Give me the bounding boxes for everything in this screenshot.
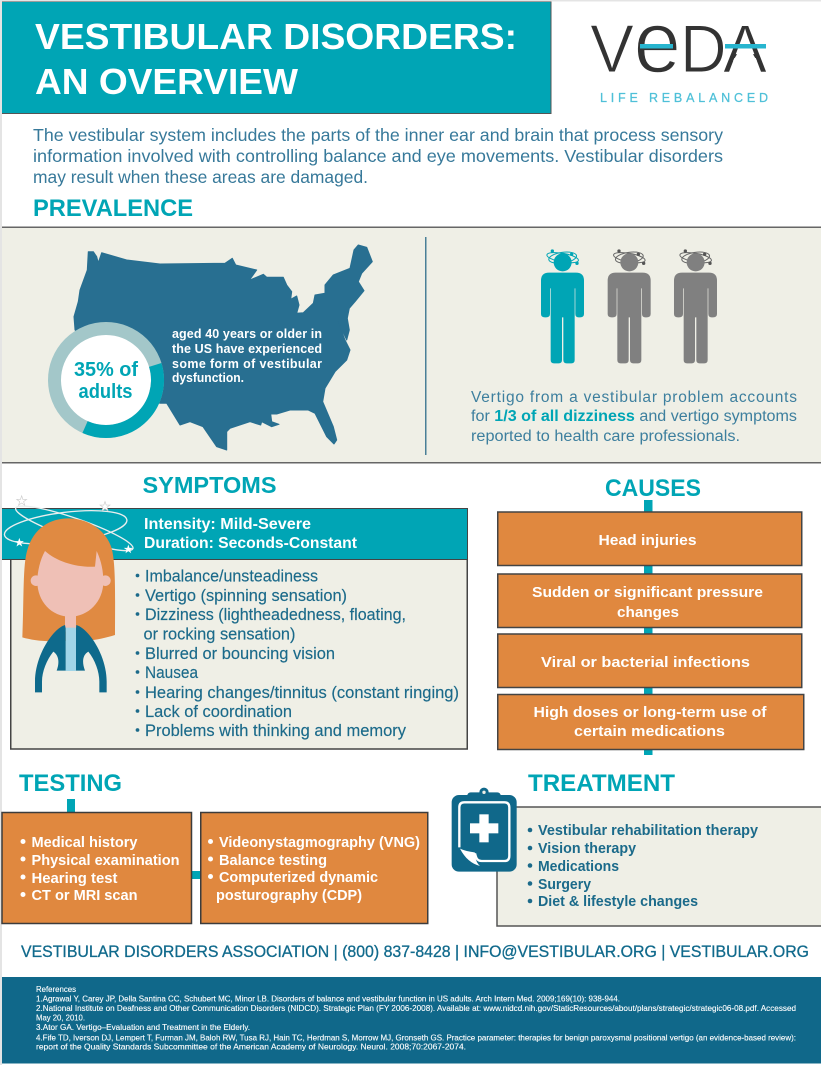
heading: treatment: TREATMENT bbox=[528, 770, 675, 797]
map text bbox=[172, 327, 322, 385]
references panel: 1.Agrawal Y, Carey JP, Della Santina CC, Schubert MC, Minor LB. Disorders of balance and vestibular function in US adults. Arch Intern Med. 2009;169(10): 938-944. bbox=[36, 994, 620, 1004]
panel: treatment bbox=[497, 807, 821, 926]
map text: some form of vestibular bbox=[172, 357, 322, 371]
logo: VeDA: A bbox=[723, 11, 767, 87]
contact line: VESTIBULAR DISORDERS ASSOCIATION | (800) 837-8428 | INFO@VESTIBULAR.ORG | VESTIBULAR.ORG bbox=[21, 943, 809, 961]
symptoms list: Dizziness (lightheadedness, floating, bbox=[145, 606, 406, 624]
panel: treatment: Medications bbox=[538, 859, 619, 875]
intro text bbox=[33, 125, 723, 187]
references panel: 2.National Institute on Deafness and Other Communication Disorders (NIDCD). Strategic Plan (FY 2006-2008). Available at: www.nidcd.nih.gov/StaticResources/about/plans/strategic/strategic06-08.pdf. Accessed bbox=[36, 1003, 796, 1013]
heading: prevalence: PREVALENCE bbox=[33, 195, 193, 222]
map text: dysfunction. bbox=[172, 371, 244, 385]
panel: symptoms list box bbox=[11, 558, 467, 749]
heading: causes: CAUSES bbox=[605, 475, 701, 502]
references panel: May 20, 2010. bbox=[36, 1012, 85, 1022]
testing box 1: Physical examination bbox=[32, 853, 180, 869]
intro text: may result when these areas are damaged. bbox=[33, 167, 368, 187]
icon: dizzy woman bbox=[3, 496, 136, 692]
testing box 1: Hearing test bbox=[32, 871, 118, 887]
references panel: References bbox=[36, 984, 76, 994]
intro text: The vestibular system includes the parts of the inner ear and brain that process sensory bbox=[33, 125, 723, 145]
US map bbox=[74, 245, 372, 450]
cause: pressure changes: changes bbox=[617, 604, 679, 621]
panel: symptoms header bar bbox=[2, 508, 468, 560]
symptoms list: Blurred or bouncing vision bbox=[145, 645, 335, 663]
map text: the US have experienced bbox=[172, 342, 322, 356]
panel: treatment: Vision therapy bbox=[538, 841, 636, 857]
donut: 35% of adults: 35% of bbox=[74, 359, 138, 381]
title banner bbox=[2, 2, 552, 114]
panel: treatment: Diet & lifestyle changes bbox=[538, 894, 698, 910]
cause: infections: Viral or bacterial infections bbox=[541, 654, 750, 671]
testing flow bbox=[2, 799, 428, 924]
intro text: information involved with controlling balance and eye movements. Vestibular disorders bbox=[33, 146, 723, 166]
cause: infections bbox=[498, 634, 802, 688]
logo: VeDA: V bbox=[590, 11, 634, 87]
symptoms list: Vertigo (spinning sensation) bbox=[145, 587, 347, 605]
testing box 2: posturography (CDP) bbox=[216, 888, 362, 904]
map text: aged 40 years or older in bbox=[172, 327, 322, 341]
references panel bbox=[2, 977, 821, 1064]
references panel: report of the Quality Standards Subcommittee of the American Academy of Neurology. Neurol. 2008;70:2067-2074. bbox=[36, 1042, 466, 1052]
logo: VeDA: D bbox=[680, 12, 727, 87]
testing box 1: CT or MRI scan bbox=[32, 888, 138, 904]
title: AN OVERVIEW bbox=[35, 61, 298, 102]
icon: person gray 1 bbox=[608, 249, 651, 363]
panel: treatment: Vestibular rehabilitation therapy bbox=[538, 823, 758, 839]
testing box 2: Videonystagmography (VNG) bbox=[219, 835, 420, 851]
testing box 2: Computerized dynamic bbox=[219, 870, 378, 886]
symptoms list: Lack of coordination bbox=[145, 703, 292, 721]
vertigo text: Vertigo from a vestibular problem accounts bbox=[471, 389, 797, 406]
donut: 35% of adults bbox=[54, 328, 158, 432]
panel: treatment: Surgery bbox=[538, 877, 591, 893]
panel: symptoms header bar: Intensity: Mild-Severe bbox=[144, 516, 311, 533]
cause: head injuries bbox=[498, 512, 802, 566]
references panel: 3.Ator GA. Vertigo–Evaluation and Treatment in the Elderly. bbox=[36, 1022, 250, 1032]
panel: prevalence bbox=[2, 226, 821, 464]
symptoms list: Hearing changes/tinnitus (constant ringing) bbox=[145, 684, 459, 702]
title: VESTIBULAR DISORDERS: bbox=[35, 16, 517, 57]
vertigo text: reported to health care professionals. bbox=[471, 428, 740, 445]
logo: VeDA bbox=[590, 0, 768, 105]
symptoms list: or rocking sensation) bbox=[144, 626, 296, 644]
heading: symptoms: SYMPTOMS bbox=[142, 472, 276, 498]
symptoms list: Imbalance/unsteadiness bbox=[145, 568, 318, 586]
testing box 2: Balance testing bbox=[219, 853, 327, 869]
symptoms list: Nausea bbox=[145, 664, 199, 682]
cause: pressure changes: Sudden or significant pressure bbox=[532, 584, 763, 601]
testing box 2 bbox=[201, 812, 428, 924]
testing box 1 bbox=[2, 812, 192, 924]
cause: medications: certain medications bbox=[574, 723, 725, 740]
cause: medications: High doses or long-term use of bbox=[534, 704, 768, 721]
title bbox=[35, 16, 517, 102]
symptoms list: Problems with thinking and memory bbox=[145, 722, 407, 740]
symptoms list bbox=[136, 568, 459, 740]
vertigo text bbox=[471, 389, 797, 445]
icon: clipboard bbox=[452, 788, 517, 872]
icon: person gray 2 bbox=[674, 249, 717, 363]
logo: VeDA: LIFE REBALANCED bbox=[600, 91, 768, 105]
panel: symptoms header bar: Duration: Seconds-Constant bbox=[144, 535, 357, 552]
testing box 1: Medical history bbox=[32, 835, 138, 851]
cause: pressure changes bbox=[498, 574, 802, 628]
icon: person teal bbox=[541, 249, 584, 363]
causes flow bbox=[498, 500, 804, 755]
cause: head injuries: Head injuries bbox=[598, 532, 696, 549]
vertigo text: for 1/3 of all dizziness and vertigo symptoms bbox=[471, 408, 797, 425]
heading: testing: TESTING bbox=[19, 770, 122, 797]
donut: 35% of adults: adults bbox=[78, 381, 132, 403]
cause: medications bbox=[498, 694, 804, 750]
